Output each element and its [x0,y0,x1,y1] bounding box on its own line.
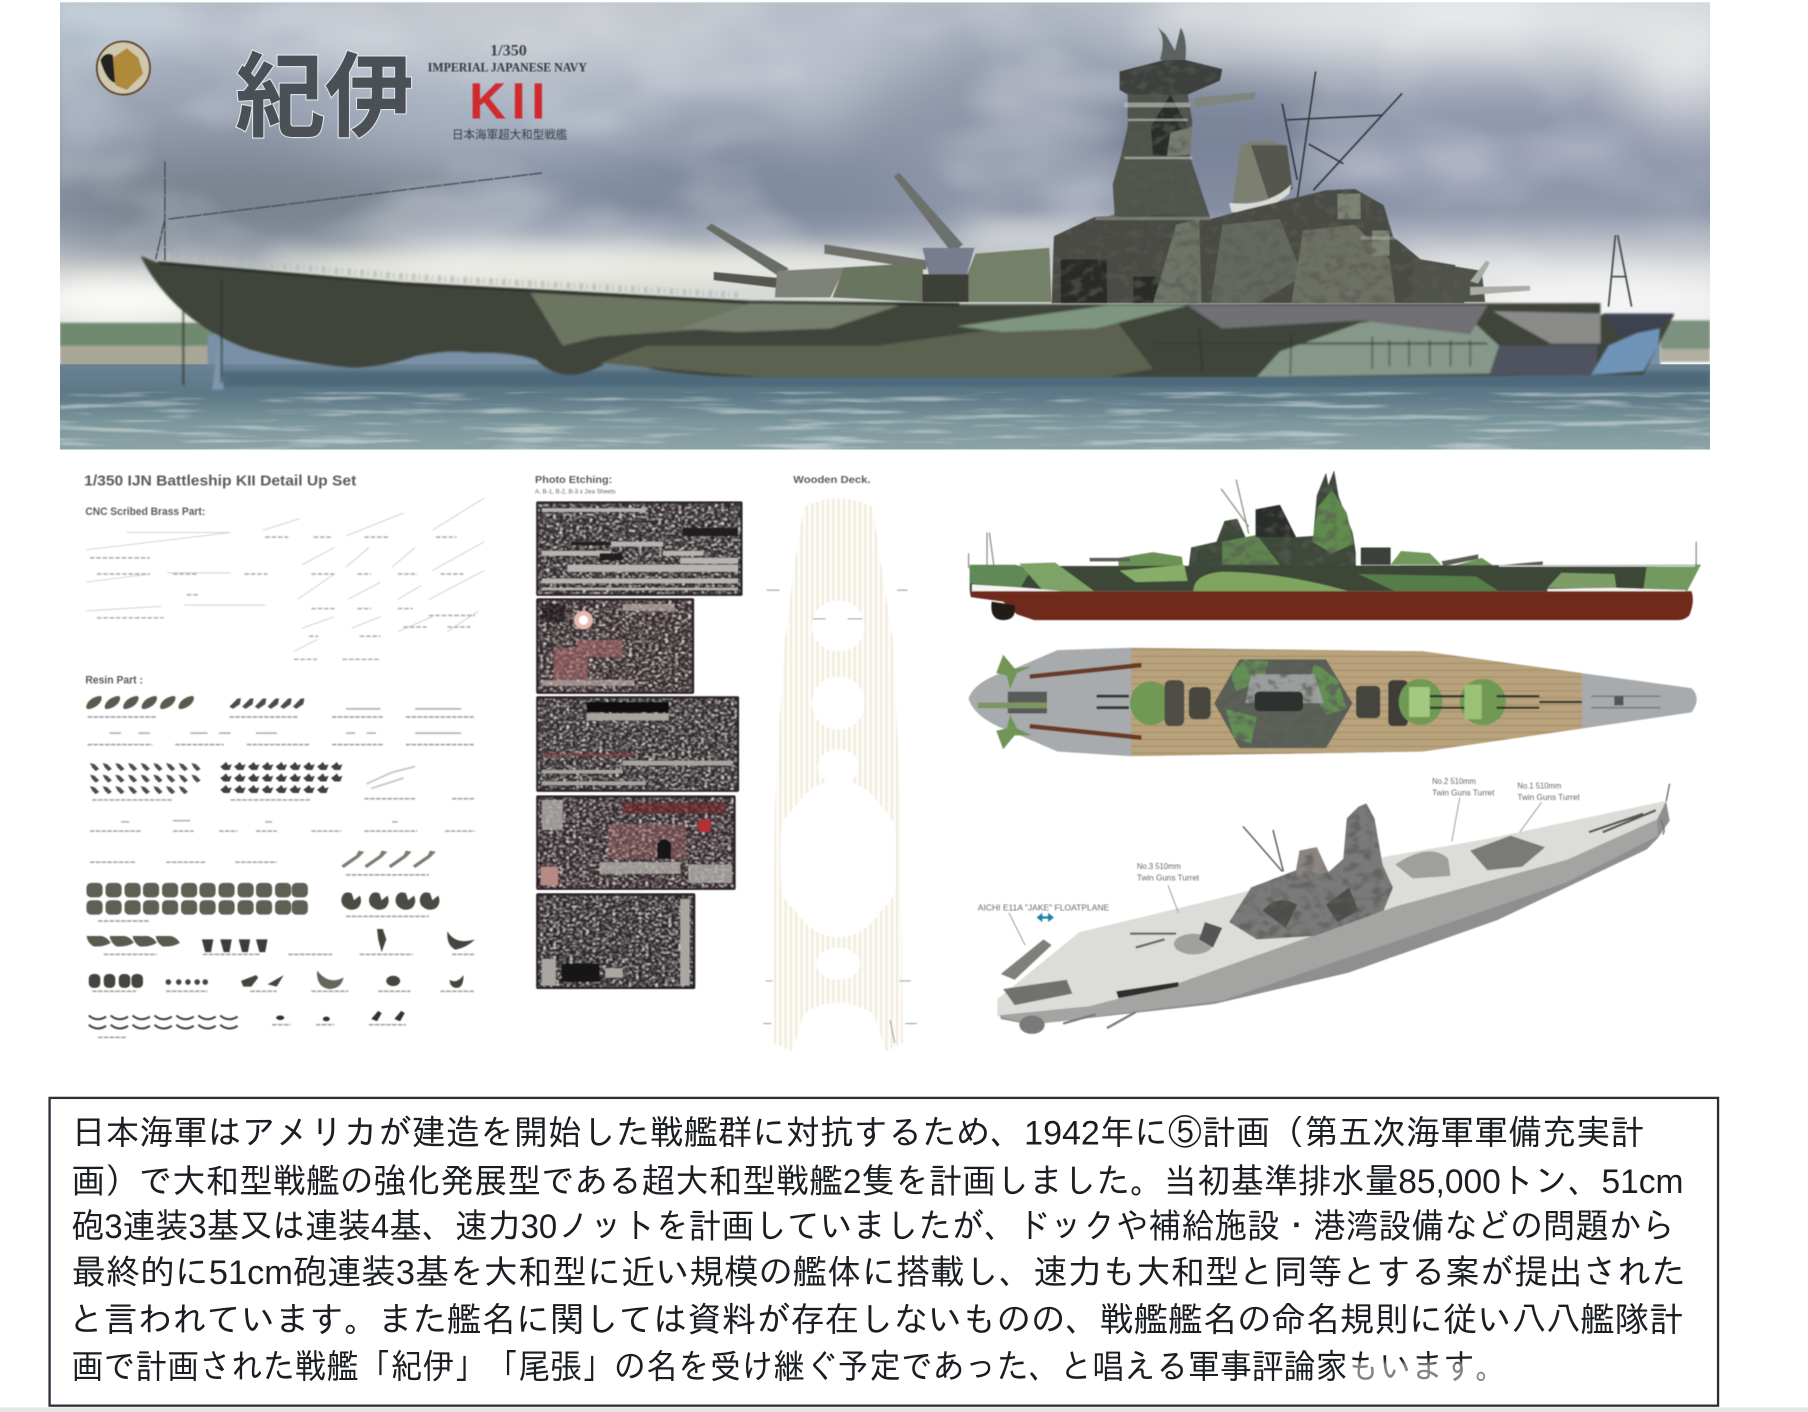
heading: resin parts: Resin Part : [85,675,143,687]
bottom grey strip [0,1407,1808,1412]
callout: turret 1: Twin Guns Turret [1517,793,1580,802]
etch sheet 3 [536,696,739,792]
callout: turret 3: Twin Guns Turret [1137,874,1200,883]
title block: scale and KII: IMPERIAL JAPANESE NAVY [428,60,587,74]
resin: curved parts [341,892,439,910]
title block: scale and KII: 日本海軍超大和型戦艦 [452,126,568,142]
main gun barrels and turrets [706,173,1052,302]
etch sheet 1 [536,501,743,596]
callout: turret 1: No.1 510mm [1517,781,1562,790]
brass part labels [90,537,475,659]
callout: floatplane: AICHI E11A "JAKE" FLOATPLANE [978,904,1110,913]
callout: turret 3 [1137,862,1200,913]
title kanji: 紀伊 [235,22,414,156]
callout: turret 2: Twin Guns Turret [1432,788,1495,797]
line 2: 画）で大和型戦艦の強化発展型である超大和型戦艦2隻を計画しました。当初基準排水量85,000トン、51cm [71,1163,1683,1201]
isometric view: grey 3D model [978,777,1670,1034]
aft radio mast [1609,235,1632,307]
line 6: 画で計画された戦艦「紀伊」「尾張」の名を受け継ぐ予定であった、と唱える軍事評論家もいます。 [71,1349,1507,1387]
faded watermark over text end [1349,1362,1522,1383]
etch sheet 5 [536,893,695,989]
ship superstructure [156,23,1632,307]
etch sheet 4 [536,795,736,890]
sub caption: A, B-1, B-2, B-3 x 2ea Sheets [535,488,616,495]
banner painting: battleship Kii at anchor [23,0,1776,450]
heading: detail up set: 1/350 IJN Battleship KII Detail Up Set [84,473,357,489]
line 4: 最終的に51cm砲連装3基を大和型に近い規模の艦体に搭載し、速力も大和型と同等とする案が提出された [71,1254,1686,1292]
title block: scale and KII: 1/350 [490,42,527,59]
text panel: historical description [50,1098,1718,1406]
panel: wooden deck [763,475,917,1067]
resin: tiny labels [88,717,475,1037]
callout: turret 1 [1517,781,1580,832]
panel: detail up set parts [84,473,484,1037]
plan view: deck from above [969,648,1697,756]
foremast rear rigging [1282,71,1402,199]
resin: rows of marks [90,762,415,794]
resin: small details [110,709,461,822]
resin: barrels [341,851,436,868]
heading: wooden deck: Wooden Deck. [793,475,871,486]
resin: turret tops grid [86,883,308,915]
callout: turret 2: No.2 510mm [1432,777,1476,786]
resin: small blobs [89,971,464,989]
bow mast and rigging [156,161,542,260]
resin: capsules [86,696,304,709]
title block: scale and KII [428,42,587,142]
line 3: 砲3連装3基又は連装4基、速力30ノットを計画していましたが、ドックや補給施設・港湾設備などの問題から [71,1208,1674,1246]
resin: hull pieces [86,929,475,952]
ship hull with camouflage [141,256,1674,390]
profile view: camouflaged side elevation [969,470,1701,620]
title block: scale and KII: KII [469,73,545,130]
callout: turret 3: No.3 510mm [1137,862,1181,871]
heading: brass parts: CNC Scribed Brass Part: [85,506,205,518]
sea [60,334,1710,450]
resin: arcs [89,1011,405,1028]
arrow: blue marker [1037,913,1054,922]
callout: turret 2 [1432,777,1495,841]
heading: photo etching: Photo Etching: [535,475,612,486]
line 5: と言われています。また艦名に関しては資料が存在しないものの、戦艦艦名の命名規則に従い八八艦隊計 [69,1301,1683,1339]
logo badge [97,41,150,95]
panel: photo etching [535,475,743,989]
shoreline [60,320,1710,368]
brass part sketches [86,498,484,651]
etch sheet 2 [536,598,694,694]
line 1: 日本海軍はアメリカが建造を開始した戦艦群に対抗するため、1942年に⑤計画（第五次海軍軍備充実計 [71,1115,1644,1153]
deck plan [763,499,917,1067]
callout: floatplane [978,904,1110,945]
sky with storm clouds [23,0,1776,348]
